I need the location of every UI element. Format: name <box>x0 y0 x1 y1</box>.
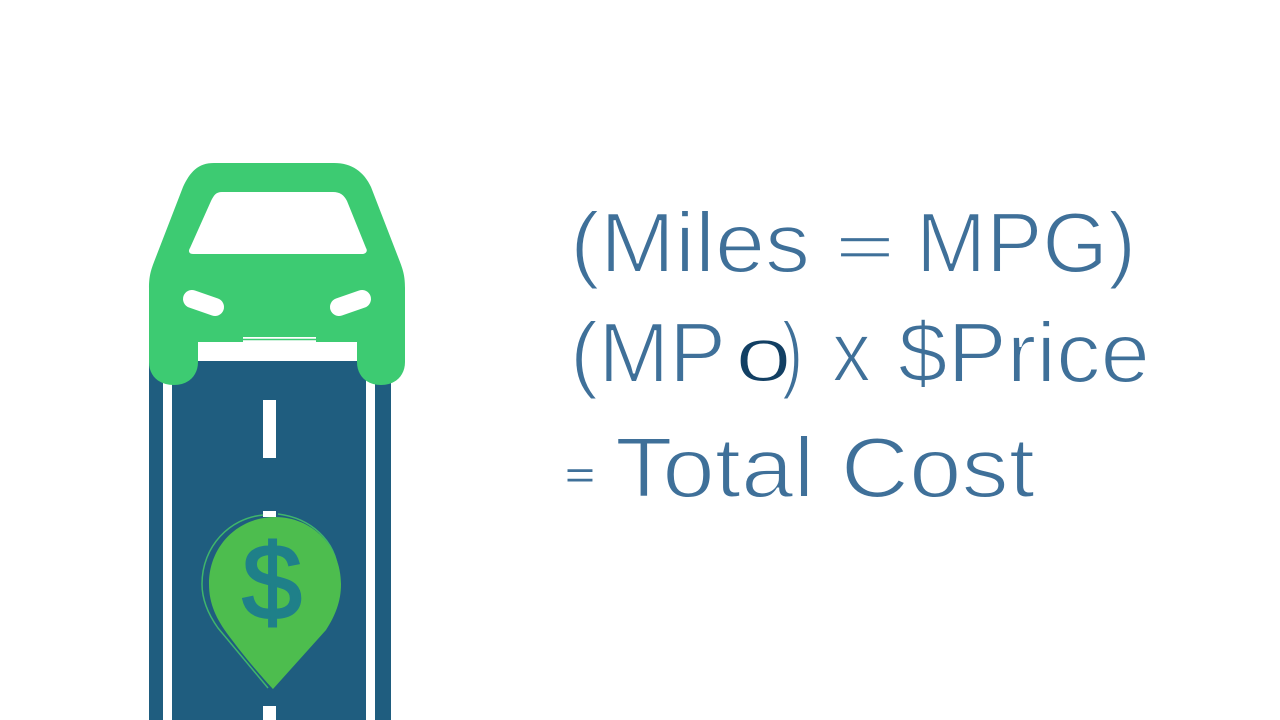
formula line 1: = <box>835 213 895 280</box>
formula line 1: MPG) <box>916 196 1136 291</box>
formula line 2: $Price <box>898 306 1150 401</box>
road <box>149 355 391 720</box>
formula line 3: Total Cost <box>615 421 1035 516</box>
formula line 2: (MP <box>570 306 726 401</box>
formula line 2: x <box>832 305 871 400</box>
formula line 3: = <box>565 455 595 497</box>
icon: map pin with dollar sign <box>202 514 341 689</box>
dollar sign: $ <box>242 522 302 642</box>
dark letter o: o <box>735 310 792 398</box>
formula line 1: (Miles <box>570 196 810 291</box>
formula line 1 <box>570 196 1136 291</box>
formula line 2 <box>570 305 1150 401</box>
formula line 2: ) <box>782 306 803 401</box>
icon: car <box>149 163 405 385</box>
